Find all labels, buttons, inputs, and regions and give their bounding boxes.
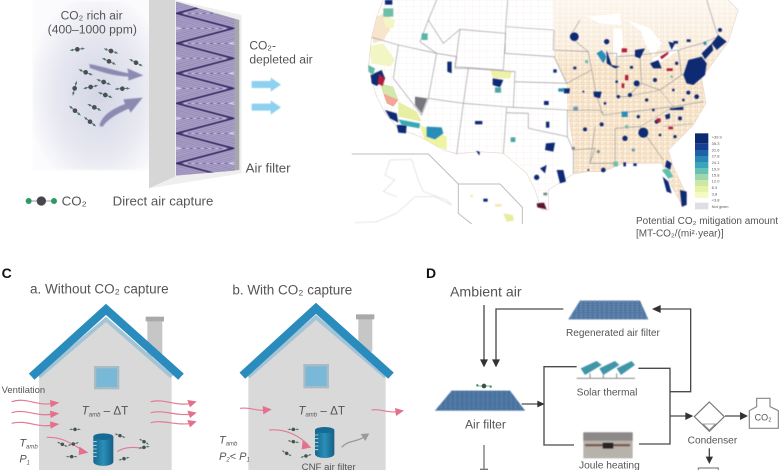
text: air filter: Air filter: [246, 161, 291, 176]
legend labels: >39.9: [712, 135, 723, 140]
text: T amb minus delta T, a: T: [82, 405, 89, 418]
map legend: [695, 133, 729, 209]
lakes: [587, 13, 680, 65]
legend labels: 19.9: [712, 166, 720, 171]
panel C: houses: [2, 265, 404, 470]
text: T amb P2 less than P1: T: [219, 434, 226, 446]
condenser: [694, 402, 724, 431]
air filter pleats: [176, 2, 235, 176]
text: air filter: Air filter: [465, 417, 506, 431]
arrow: depleted air lower: [252, 100, 281, 115]
house a: [32, 309, 181, 470]
background haze: [33, 0, 153, 170]
legend colour ramp: [695, 133, 708, 209]
legend labels: 15.8: [712, 173, 720, 178]
joule heating photo: [583, 432, 633, 458]
legend labels: 35.3: [712, 141, 720, 146]
legend labels: 27.8: [712, 154, 720, 159]
legend labels: Not given: [712, 204, 729, 209]
arrowheads: [480, 305, 748, 464]
CO2 bottle: [749, 398, 778, 428]
heading: without capture: a. Without CO₂ capture: [30, 281, 169, 296]
text: T amb minus delta T, b: T: [298, 405, 305, 418]
text: CO2 rich air: CO₂ rich air: [61, 8, 123, 22]
panel: direct air capture: [26, 0, 313, 209]
text: T amb P1: P: [19, 454, 27, 466]
CO2 bottle: CO₂: [755, 413, 772, 423]
text: T amb P1: 1: [27, 460, 30, 466]
panel D: process flow: [426, 265, 778, 470]
red regions: [377, 48, 673, 209]
text: T amb P2 less than P1: 2: [225, 458, 230, 464]
arrow: incoming air upper: [89, 64, 143, 81]
text: ambient air: Ambient air: [450, 285, 522, 301]
text: units: [MT-CO₂/(mi²·year)]: [636, 229, 724, 240]
land outline: [368, 0, 738, 210]
panel label C: C: [2, 265, 12, 281]
legend labels: 31.6: [712, 147, 720, 152]
legend labels: <3.8: [712, 198, 720, 203]
text: T amb P1: T: [19, 438, 26, 450]
text: CO2-depleted air: CO₂-: [249, 38, 276, 52]
arrow: clean air: [342, 433, 369, 447]
state borders: [372, 0, 718, 173]
icon: captured molecule: [476, 384, 492, 388]
heading: with capture: b. With CO₂ capture: [232, 283, 352, 298]
text: CO2 legend: CO₂: [62, 194, 87, 209]
text: T amb minus delta T, a: amb: [89, 413, 101, 419]
panel label D: D: [426, 265, 436, 281]
house b: [242, 308, 391, 470]
air filter mesh: [435, 391, 525, 411]
text: T amb P2 less than P1: amb: [226, 441, 238, 447]
molecules b: [281, 428, 312, 459]
legend labels: 12.0: [712, 179, 720, 184]
water container: [698, 468, 718, 470]
icon: CO2 molecule legend: [26, 196, 57, 206]
arrows: ventilation a: [12, 400, 398, 452]
text: condenser: Condenser: [688, 435, 738, 446]
air filter frame: [149, 0, 242, 188]
legend labels: 24.1: [712, 160, 720, 165]
molecules: CO2 rich air: [68, 46, 144, 128]
teal regions: [368, 8, 707, 195]
text: ventilation: Ventilation: [2, 384, 45, 395]
inset: Alaska: [355, 159, 452, 223]
text: T amb P2 less than P1: < P: [230, 451, 247, 463]
text: potential mitigation: Potential CO₂ mitigation amount: [636, 216, 778, 227]
legend labels: 3.8: [712, 191, 718, 196]
grey region: [385, 0, 427, 113]
inset: Hawaii: [470, 195, 514, 222]
CNF filter cylinder b: [315, 427, 334, 458]
text: T amb P2 less than P1: 1: [246, 458, 250, 464]
high-density regions: [371, 28, 727, 207]
CNF filter cylinder a: [93, 433, 113, 466]
text: ppm range: (400–1000 ppm): [48, 22, 137, 36]
arrowheads: [50, 400, 404, 455]
regenerated air filter: [568, 301, 648, 319]
text: depleted air: depleted air: [249, 52, 313, 66]
text: T amb minus delta T, a: – ΔT: [100, 405, 128, 418]
text: solar thermal: Solar thermal: [577, 388, 637, 399]
arrow: depleted air upper: [252, 78, 281, 92]
panel: US map: [352, 0, 778, 240]
flow lines: [480, 305, 742, 469]
arrow: incoming air lower: [99, 98, 143, 127]
map land: [360, 0, 747, 213]
text: direct air capture: Direct air capture: [113, 194, 213, 209]
solar thermal panels: [577, 361, 635, 378]
text: regenerated air filter: Regenerated air filter: [566, 328, 660, 339]
molecules a: [57, 428, 150, 462]
text: T amb P1: amb: [26, 445, 38, 451]
text: T amb minus delta T, b: amb: [305, 413, 318, 419]
text: T amb P2 less than P1: P: [219, 451, 227, 463]
legend labels: 8.3: [712, 185, 718, 190]
legend labels: [712, 135, 729, 209]
inset frame: [352, 154, 522, 224]
text: T amb minus delta T, b: – ΔT: [317, 405, 345, 418]
